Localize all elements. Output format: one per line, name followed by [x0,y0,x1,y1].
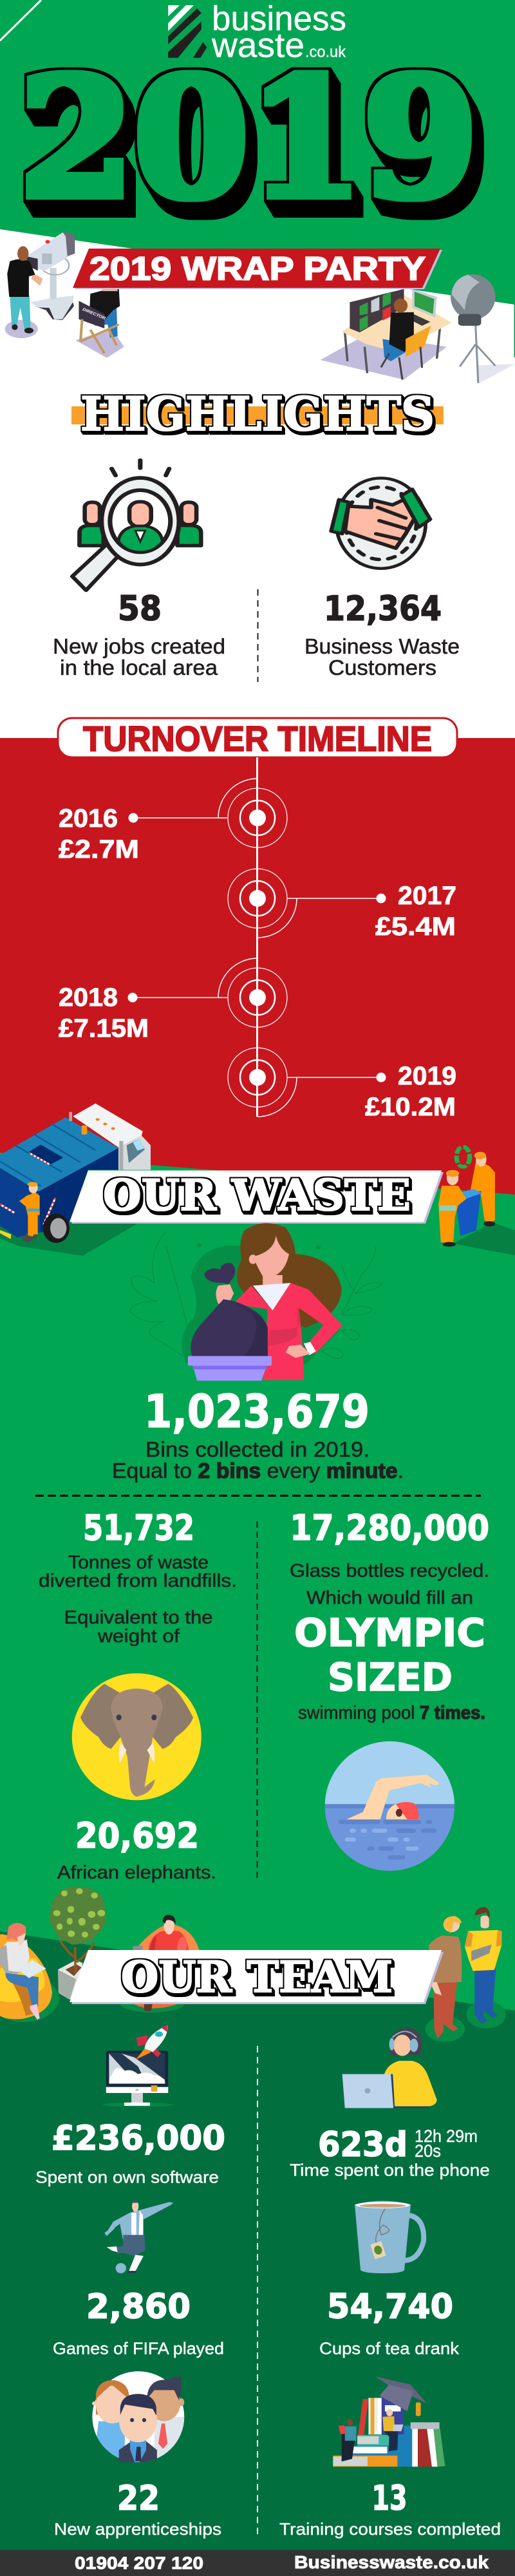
time remainder [415,2126,478,2161]
node: 2018: 2018 [59,983,118,1012]
icon: books and graduation cap [333,2376,445,2467]
caption: New apprenticeships [54,2519,221,2539]
illustration: woman holding bin bag [130,1223,381,1381]
background: top green area [0,0,515,305]
illustration: recycling truck [0,1103,151,1256]
icon: footballer [104,2199,173,2273]
node: 2017 [228,869,456,941]
caption: Business Waste [304,634,460,658]
illustration: man on beanbag [120,1915,200,2012]
icon: elephant [72,1673,201,1800]
icon: handshake [331,478,430,569]
icon: rocket launching from monitor [103,2025,173,2107]
time remainder: 20s [415,2141,441,2161]
stat: cups of tea: 54,740 [327,2287,453,2326]
decorative leaves [130,1232,381,1359]
caption: in the local area [60,656,218,679]
callout: olympic sized [294,1611,485,1700]
node: 2019: £10.2M [365,1093,456,1121]
heading: turnover timeline [58,718,457,759]
stat: software [35,2119,225,2187]
stat: tonnes diverted: 51,732 [83,1508,194,1548]
footer bar [0,2550,515,2576]
chart: turnover timeline [59,757,456,1121]
caption: Time spent on the phone [290,2160,490,2179]
callout: olympic sized: OLYMPIC [294,1611,485,1656]
icon: mug of tea [355,2201,424,2273]
banner: 2019 wrap party [73,249,442,289]
caption [39,1552,237,1647]
caption [304,634,460,679]
caption [112,1437,404,1482]
heading text: HIGHLIGHTS [80,386,435,441]
title: 2019: 2019 [19,41,478,236]
caption: swimming pool 7 times. [298,1703,485,1723]
icon: magnifying glass over people [72,460,201,591]
caption: Tonnes of waste [68,1552,209,1573]
caption: weight of [97,1626,180,1647]
illustration: editor at desk [320,289,452,380]
caption: Cups of tea drank [319,2339,460,2358]
icon: apprentices [92,2371,184,2462]
caption: Training courses completed [279,2519,501,2539]
background: red turnover band [0,738,515,1198]
node: 2018 [59,958,287,1043]
node: 2016: 2016 [59,804,118,833]
stat: glass bottles: 17,280,000 [290,1508,489,1548]
caption: African elephants. [57,1862,216,1883]
banner: our waste [70,1170,444,1224]
stat: bins collected: 1,023,679 [144,1385,370,1438]
stat: new jobs [53,589,225,679]
stat: cups of tea [319,2287,460,2358]
stat: training courses: 13 [372,2479,407,2518]
illustration: waste workers and bin [438,1147,515,1255]
heading text: OUR TEAM [121,1952,393,2002]
illustration: two men talking [426,1907,506,2042]
stat: phone time: 623d [318,2125,407,2164]
illustration: director in chair: DIRECTOR [82,308,106,321]
background: bright green waste area [0,1153,515,2016]
illustration: camera operator [5,231,75,338]
background: dark green team area [0,1931,515,2550]
caption: Customers [328,656,436,679]
caption: Glass bottles recycled. [290,1561,489,1582]
illustration: director in chair [75,289,124,358]
stat: african elephants: 20,692 [75,1815,199,1856]
banner: our team [70,1950,444,2004]
caption: Equivalent to the [64,1607,212,1628]
caption: Bins collected in 2019. [145,1437,370,1461]
icon: logo stripes [168,5,207,58]
time remainder: 12h 29m [415,2126,478,2146]
stat: tonnes diverted [39,1508,237,1647]
caption: Which would fill an [306,1588,473,1609]
node: 2017: £5.4M [375,913,456,941]
stat: bins collected [112,1385,404,1482]
phone number: 01904 207 120 [75,2553,203,2573]
logo [168,0,346,64]
stat: phone time [290,2125,490,2179]
heading: highlights [71,386,444,441]
heading text: OUR WASTE [103,1170,411,1220]
stat: apprenticeships [54,2479,221,2539]
stat: customers [304,589,460,679]
caption: Equal to 2 bins every minute. [112,1459,404,1482]
stat: fifa games [53,2287,224,2358]
stat: fifa games: 2,860 [86,2287,191,2326]
icon: call centre woman [342,2028,437,2108]
callout: olympic sized: SIZED [328,1655,453,1700]
illustration: studio light [451,274,515,383]
caption [53,634,225,679]
stat: new jobs: 58 [118,589,162,629]
stat: software: £236,000 [52,2119,225,2158]
caption: diverted from landfills. [39,1571,237,1591]
node: 2017: 2017 [398,882,456,910]
caption [290,1561,489,1609]
caption: Games of FIFA played [53,2339,224,2358]
website: Businesswaste.co.uk [294,2552,489,2572]
logo: .co.uk [305,44,346,61]
stat: african elephants [57,1815,216,1883]
node: 2019: 2019 [398,1062,456,1090]
illustration: woman on beanbag and tree [0,1886,106,2022]
node: 2016 [59,779,287,864]
caption: Spent on own software [35,2168,219,2187]
caption: New jobs created [53,634,225,658]
logo: waste [211,26,304,64]
stat: training courses [279,2479,501,2539]
node: 2016: £2.7M [59,835,139,864]
banner title: 2019 WRAP PARTY [89,250,426,287]
stat: apprenticeships: 22 [117,2479,160,2518]
stat: customers: 12,364 [324,589,442,629]
icon: swimmer [325,1741,455,1873]
node: 2019 [228,1048,456,1121]
logo wordmark: business [212,0,346,38]
heading text: TURNOVER TIMELINE [83,719,432,759]
stat: glass bottles [290,1508,489,1723]
node: 2018: £7.15M [59,1014,149,1043]
